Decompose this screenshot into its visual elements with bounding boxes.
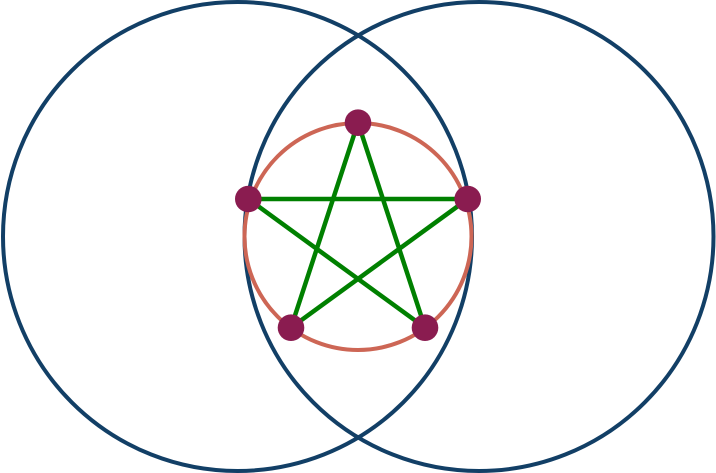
right blue circle <box>244 2 714 471</box>
left blue circle <box>3 2 472 471</box>
central coral circle <box>244 123 472 350</box>
vertex dots <box>235 109 481 341</box>
green pentagram star <box>248 123 468 328</box>
